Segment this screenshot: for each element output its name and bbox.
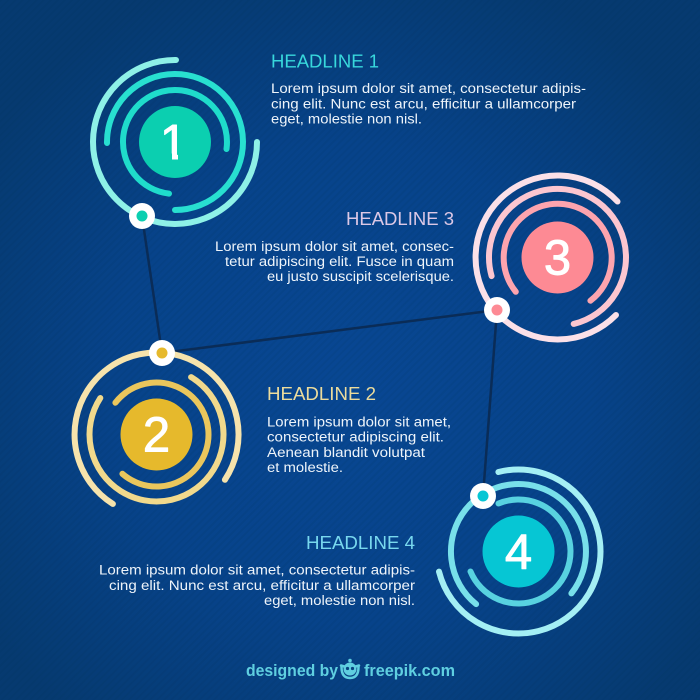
node 2: [149, 340, 175, 366]
body 2: [267, 414, 451, 476]
body 2: Aenean blandit volutpat: [267, 445, 425, 461]
node 4: [470, 483, 496, 509]
number 3: 3: [544, 232, 571, 286]
circle 3: [476, 175, 626, 339]
circle 4: [439, 469, 600, 633]
body 1: cing elit. Nunc est arcu, efficitur a ullamcorper: [271, 96, 576, 112]
headline 4: HEADLINE 4: [306, 532, 415, 553]
body 3: eu justo suscipit scelerisque.: [267, 269, 454, 285]
text block 1: [271, 50, 586, 128]
body 4: Lorem ipsum dolor sit amet, consectetur adipis-: [99, 562, 415, 578]
node 1: [129, 203, 155, 229]
footer credit: [246, 659, 455, 680]
body 3: tetur adipiscing elit. Fusce in quam: [225, 254, 454, 270]
number 1: 1: [160, 116, 187, 170]
body 3: Lorem ipsum dolor sit amet, consec-: [215, 239, 454, 255]
body 1: [271, 81, 586, 128]
body 1: eget, molestie non nisl.: [271, 112, 422, 128]
text block 2: [267, 383, 451, 476]
text block 4: [99, 532, 415, 609]
node 3: [484, 297, 510, 323]
footer credit: designed by: [246, 661, 339, 680]
headline 2: HEADLINE 2: [267, 383, 376, 404]
circle 1: [93, 60, 257, 224]
number 4: 4: [505, 526, 532, 580]
footer credit: freepik.com: [364, 661, 455, 680]
body 4: eget, molestie non nisl.: [264, 593, 415, 609]
headline 3: HEADLINE 3: [346, 208, 454, 229]
body 1: Lorem ipsum dolor sit amet, consectetur adipis-: [271, 81, 586, 97]
body 2: et molestie.: [267, 460, 343, 476]
body 2: Lorem ipsum dolor sit amet,: [267, 414, 451, 430]
body 2: consectetur adipiscing elit.: [267, 430, 444, 446]
body 4: cing elit. Nunc est arcu, efficitur a ullamcorper: [109, 578, 415, 594]
connector lines: [142, 216, 497, 496]
text block 3: [215, 208, 454, 285]
headline 1: HEADLINE 1: [271, 50, 379, 72]
circle 2: [75, 352, 239, 504]
number 2: 2: [143, 408, 170, 462]
body 4: [99, 562, 415, 609]
body 3: [215, 239, 454, 285]
icon: freepik mascot: [341, 659, 359, 678]
